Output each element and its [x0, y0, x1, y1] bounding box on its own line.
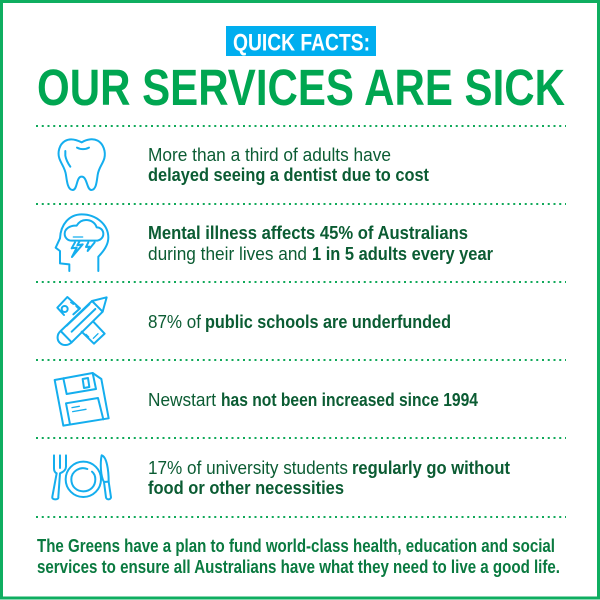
fact: public schools: public schools are underfunded: [205, 312, 451, 332]
icon: ruler and pencil: [57, 297, 107, 345]
icon: plate, fork and knife: [52, 455, 111, 499]
fact: university students: regularly go without: [352, 458, 510, 478]
closing statement: [37, 536, 560, 577]
fact: mental illness: Mental illness affects 45% of Australians: [148, 223, 468, 243]
fact: public schools: 87% of: [148, 312, 202, 332]
fact: newstart: [148, 390, 478, 410]
fact: newstart: has not been increased since 1994: [221, 390, 478, 410]
fact: university students: food or other necessities: [148, 478, 344, 498]
fact: mental illness: during their lives and: [148, 244, 307, 264]
fact: dentist: delayed seeing a dentist due to cost: [148, 165, 429, 185]
icon: tooth: [59, 139, 105, 190]
fact: university students: 17% of university students: [148, 458, 348, 478]
fact: newstart: Newstart: [148, 390, 216, 410]
icon: head with storm cloud: [56, 214, 108, 271]
fact: university students: [148, 458, 510, 498]
fact: mental illness: 1 in 5 adults every year: [312, 244, 493, 264]
fact: mental illness: [148, 223, 493, 264]
fact: dentist: More than a third of adults have: [148, 145, 391, 165]
label: quick facts: QUICK FACTS:: [233, 30, 370, 56]
fact: dentist: [148, 145, 429, 185]
icon: floppy disk: [55, 373, 109, 426]
